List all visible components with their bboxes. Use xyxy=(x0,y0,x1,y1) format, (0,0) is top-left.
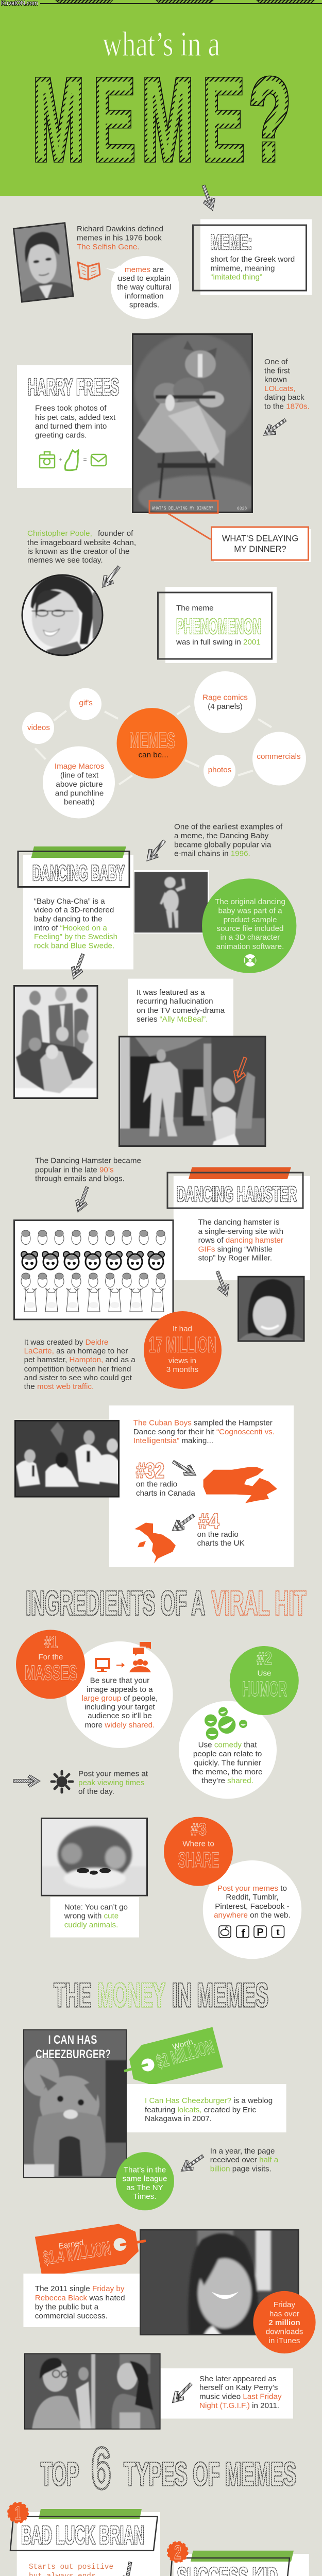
speech bubble: memes are xyxy=(125,265,164,274)
bubble: image macros: beneath) xyxy=(64,798,95,807)
panel: 2 use humor: people can relate to xyxy=(193,1750,262,1758)
price tag: earned 1.4 million: $1.4 MILLION xyxy=(42,2238,112,2269)
stat: 4 in UK: #4 xyxy=(198,1509,219,1533)
stat: 32 in Canada: #32 xyxy=(136,1459,164,1483)
bubble: gifs: gif's xyxy=(79,699,93,707)
panel: Harry Frees xyxy=(17,365,132,488)
panel: 3 where to share: #3 xyxy=(191,1820,207,1839)
price tag: earned 1.4 million xyxy=(35,2224,146,2277)
panel: Harry Frees: = xyxy=(83,456,87,463)
panel: 3 where to share: SHARE xyxy=(178,1848,219,1872)
text: first LOLcats: dating back xyxy=(264,393,304,402)
orange arrow xyxy=(230,1056,251,1085)
icon: book xyxy=(78,262,100,280)
icon: monitor to people xyxy=(95,1642,151,1672)
watermark: KuvatON.com xyxy=(1,1,38,7)
text: Dawkins: memes in his 1976 book xyxy=(77,234,162,242)
panel: Dancing Hamster: GIFs singing “Whistle xyxy=(198,1245,273,1254)
text: half a billion: received over half a xyxy=(210,2156,278,2164)
text: created by Deidre LaCarte: LaCarte, as an homage to her xyxy=(24,1347,128,1355)
map: Canada xyxy=(204,1467,277,1503)
photo: Richard Dawkins xyxy=(8,222,80,325)
bubble: NY Times league: That’s in the xyxy=(124,2166,166,2174)
bubble: 17 million views: It had xyxy=(173,1325,192,1333)
arrow xyxy=(212,1269,233,1299)
photo: Roger Miller xyxy=(238,1276,305,1342)
panel: 1 for the masses: MASSES xyxy=(25,1661,77,1685)
bubble: videos xyxy=(22,712,54,744)
speech bubble: information xyxy=(125,292,164,301)
panel: 2 Success Kid xyxy=(168,2542,309,2576)
arrow xyxy=(67,952,89,981)
arrow xyxy=(97,563,124,591)
panel: 2 use humor: HUMOR xyxy=(242,1677,287,1701)
panel: Cuban Boys xyxy=(109,1405,294,1567)
bubble: rage comics xyxy=(194,671,256,733)
bubble: 17 million views: 17 MILLION xyxy=(149,1333,216,1358)
bubble: original dancing baby: source file included xyxy=(216,924,284,933)
stat: 4 in UK xyxy=(134,1509,245,1564)
panel: meme phenomenon: was in full swing in 2001 xyxy=(176,638,261,647)
badge: number 1 xyxy=(8,2503,28,2524)
photo: Christopher Poole xyxy=(22,575,103,659)
panel: meme phenomenon xyxy=(158,587,277,663)
text: half a billion: billion page visits. xyxy=(210,2165,272,2174)
photo: dancing baby xyxy=(134,870,209,934)
title: MEME?: M xyxy=(33,54,84,184)
text: created by Deidre LaCarte: It was created by Deidre xyxy=(24,1338,108,1347)
note: cute animals: Note: You can’t go xyxy=(64,1903,128,1912)
heading: The Money in Memes: THE xyxy=(54,1976,91,2014)
text: created by Deidre LaCarte: the most web traffic. xyxy=(24,1382,94,1391)
title: MEME?: M xyxy=(142,54,193,184)
panel: Harry Frees: greeting cards. xyxy=(35,431,87,440)
bubble: original dancing baby: in a 3D character xyxy=(221,933,280,942)
panel: Ally McBeal text: series “Ally McBeal”. xyxy=(137,1015,208,1024)
icons: social networks: f xyxy=(241,1927,245,1940)
text: created by Deidre LaCarte: pet hamster, Hampton, and as a xyxy=(24,1355,135,1364)
panel: 2 use humor: quickly. The funnier xyxy=(194,1758,261,1767)
text: dancing hamster popular: popular in the late 90’s xyxy=(35,1165,114,1174)
panel: 2 use humor: Use xyxy=(257,1669,272,1678)
callout: caption: MY DINNER? xyxy=(234,545,286,554)
panel: Friday text: commercial success. xyxy=(35,2312,108,2320)
connector lines xyxy=(35,706,272,785)
bubble: image macros: (line of text xyxy=(60,771,99,780)
heading: Top 6 Types of Memes: TOP xyxy=(41,2455,79,2493)
text: first LOLcats: One of xyxy=(264,358,288,366)
bubble: Friday downloads: in iTunes xyxy=(268,2336,300,2345)
title: MEME?: ? xyxy=(249,54,291,184)
hamster dance image xyxy=(14,1220,173,1319)
panel: 2 use humor: they’re shared. xyxy=(201,1776,253,1785)
bubble: Friday downloads xyxy=(253,2291,316,2353)
panel: Harry Frees: Frees took photos of xyxy=(35,404,107,413)
stat: 32 in Canada: charts in Canada xyxy=(136,1489,195,1498)
bubble: image macros: and punchline xyxy=(55,789,104,798)
panel: I Can Has Cheezburger text: featuring lolcats, created by Eric xyxy=(145,2106,256,2114)
panel: Dancing Baby: baby dancing to the xyxy=(34,915,103,924)
photo: Last Friday Night xyxy=(24,2353,161,2430)
text: earliest examples: a meme, the Dancing Baby xyxy=(174,832,269,840)
text: first LOLcats: to the 1870s. xyxy=(264,402,310,411)
text: created by Deidre LaCarte: competition between her friend xyxy=(24,1365,131,1374)
speech bubble: the way cultural xyxy=(117,283,172,292)
bubble: photos xyxy=(204,755,235,787)
photo: Ally McBeal xyxy=(118,1036,266,1147)
panel: Katy Perry text: herself on Katy Perry’s xyxy=(199,2383,278,2392)
bubble: NY Times league xyxy=(116,2152,174,2210)
text: Christopher Poole: memes we see today. xyxy=(27,556,103,565)
icon: CD xyxy=(244,954,257,967)
text: Christopher Poole: Christopher Poole, xyxy=(27,529,92,538)
icons: camera plus cat equals mail xyxy=(40,450,106,470)
text: peak viewing times: peak viewing times xyxy=(78,1778,145,1787)
callout: caption xyxy=(211,527,311,562)
panel: 2 use humor: the meme, the more xyxy=(193,1768,263,1776)
panel: Cuban Boys: The Cuban Boys sampled the Hampster xyxy=(133,1419,273,1428)
price tag: worth 2 million: Worth xyxy=(172,2038,194,2052)
photo: Rebecca Black xyxy=(140,2229,299,2335)
callout: caption: WHAT'S DELAYING xyxy=(222,534,298,544)
panel: 1 for the masses: Be sure that your xyxy=(90,1676,149,1685)
text: first LOLcats: LOLcats, xyxy=(264,384,296,393)
panel: Friday text xyxy=(23,2274,140,2327)
bubble: memes can be xyxy=(116,708,188,778)
panel: Dancing Baby: intro of “Hooked on a xyxy=(34,924,107,933)
panel: meme definition: mimeme, meaning xyxy=(210,264,275,273)
price tag: earned 1.4 million: Earned xyxy=(58,2238,84,2251)
panel: Dancing Hamster: The dancing hamster is xyxy=(198,1218,280,1227)
map: UK xyxy=(134,1523,176,1564)
text: dancing hamster popular: through emails and blogs. xyxy=(35,1174,125,1183)
speech bubble: used to explain xyxy=(118,274,171,283)
bubble: NY Times league: Times. xyxy=(133,2192,157,2201)
panel: Ally McBeal text xyxy=(128,979,233,1037)
panel: 1 for the masses: large group of people, xyxy=(82,1694,158,1703)
bubble: memes can be: can be... xyxy=(139,751,168,759)
panel: Friday text: Rebecca Black was hated xyxy=(35,2294,125,2302)
icons: social networks: P xyxy=(257,1927,264,1938)
panel: 1 Bad Luck Brian: Starts out positive xyxy=(29,2563,113,2571)
bubble: Friday downloads: 2 million xyxy=(268,2318,300,2327)
text: Christopher Poole: is known as the creator of the xyxy=(27,547,129,556)
panel: 1 Bad Luck Brian xyxy=(8,2503,160,2576)
panel: meme phenomenon: The meme xyxy=(176,604,214,613)
icon: laughing faces xyxy=(205,1707,247,1740)
panel: meme definition: short for the Greek word xyxy=(210,255,295,264)
photo: Blue Swede xyxy=(13,985,98,1099)
title: MEME? xyxy=(33,54,291,184)
stat: 4 in UK: charts the UK xyxy=(197,1539,245,1548)
arrow xyxy=(72,1185,93,1214)
panel: Dancing Hamster xyxy=(167,1167,310,1280)
panel: 3 where to share: anywhere on the web. xyxy=(214,1911,291,1920)
title: whats in a: what’s in a xyxy=(103,24,220,63)
heading: Top 6 Types of Memes xyxy=(41,2436,296,2501)
panel: Cuban Boys: Intelligentsia” making... xyxy=(133,1436,213,1445)
panel: Cuban Boys: Dance song for their hit “Cognoscenti vs. xyxy=(133,1428,275,1436)
bubble: commercials xyxy=(252,732,306,785)
note: cute animals xyxy=(50,1897,139,1937)
arrow xyxy=(260,415,289,440)
caption highlight xyxy=(149,501,247,539)
icons: social networks: t xyxy=(276,1926,280,1938)
text: Christopher Poole: the imageboard website 4chan, xyxy=(27,538,136,547)
bubble: 17 million views xyxy=(144,1311,222,1389)
heading: Top 6 Types of Memes: 6 xyxy=(91,2436,111,2501)
bubble: image macros: Image Macros xyxy=(55,762,105,771)
bubble: videos: videos xyxy=(27,723,50,732)
stat: 32 in Canada xyxy=(136,1456,277,1503)
panel: Dancing Baby: Feeling” by the Swedish xyxy=(34,933,117,941)
panel: 2 use humor: Use comedy that xyxy=(198,1741,257,1750)
heading: The Money in Memes: MONEY xyxy=(97,1976,165,2014)
stat: 4 in UK: on the radio xyxy=(197,1530,239,1539)
price tag: worth 2 million: $2 MILLION xyxy=(154,2036,216,2073)
panel: Ally McBeal text: recurring hallucination xyxy=(137,997,213,1006)
text: half a billion: In a year, the page xyxy=(210,2147,275,2156)
bubble: original dancing baby: baby was part of a xyxy=(218,907,282,916)
bubble: rage comics: (4 panels) xyxy=(208,702,243,711)
photo: Frees cat xyxy=(132,333,253,513)
panel: I Can Has Cheezburger text xyxy=(127,2084,286,2132)
bubble: 17 million views: views in xyxy=(168,1357,196,1365)
panel: Katy Perry text: music video Last Friday xyxy=(199,2393,282,2401)
heading: The Money in Memes xyxy=(54,1976,268,2014)
bubble: rage comics: Rage comics xyxy=(202,693,248,702)
panel: 2 use humor: #2 xyxy=(257,1649,272,1669)
speech bubble xyxy=(105,256,179,319)
text: earliest examples: became globally popular via xyxy=(174,841,272,850)
panel: 1 for the masses: including your target xyxy=(84,1703,156,1711)
panel: Dancing Baby: video of a 3D-rendered xyxy=(34,906,114,914)
bubble: original dancing baby: animation software. xyxy=(216,942,284,951)
photo: fluffy cat xyxy=(41,1818,148,1896)
bubble: gifs xyxy=(70,688,101,720)
badge: number 1: 1 xyxy=(15,2503,21,2524)
panel: 3 where to share: Where to xyxy=(182,1839,214,1849)
panel: Dancing Hamster: stop” by Roger Miller. xyxy=(198,1254,272,1263)
bubble: original dancing baby xyxy=(202,878,296,973)
panel: meme definition xyxy=(193,219,312,295)
panel: 3 where to share xyxy=(164,1817,301,1959)
title: MEME?: E xyxy=(203,54,244,184)
panel: Dancing Baby xyxy=(18,846,133,970)
bubble: Friday downloads: Friday xyxy=(274,2300,296,2309)
photo: I Can Has Cheezburger xyxy=(23,2029,127,2178)
panel: Harry Frees: + xyxy=(58,456,62,463)
panel: I Can Has Cheezburger text: Nakagawa in 2007. xyxy=(145,2114,212,2123)
panel: 3 where to share: Post your memes to xyxy=(217,1884,287,1893)
panel: Harry Frees: and turned them into xyxy=(35,422,107,431)
bubble: photos: photos xyxy=(208,766,232,774)
heading: MEME:: MEME: xyxy=(210,230,252,254)
price tag: worth 2 million xyxy=(124,2027,223,2085)
bubble: memes can be: MEMES xyxy=(129,728,175,753)
panel: Dancing Baby: rock band Blue Swede. xyxy=(34,942,114,951)
arrow xyxy=(142,837,169,865)
title: MEME?: E xyxy=(94,54,135,184)
heading: Dancing Baby: DANCING BABY xyxy=(32,861,125,886)
green title banner xyxy=(0,0,322,196)
bubble: image macros: above picture xyxy=(56,780,103,789)
panel: 1 for the masses: image appeals to a xyxy=(87,1685,153,1694)
text: first LOLcats: known xyxy=(264,375,287,384)
heading: Harry Frees: HARRY FREES xyxy=(28,374,119,400)
bubble: Friday downloads: has over xyxy=(269,2310,299,2318)
panel: Katy Perry text: Night (T.G.I.F.) in 2011. xyxy=(199,2401,279,2410)
icons: social networks xyxy=(219,1926,284,1940)
panel: 1 for the masses xyxy=(16,1630,173,1748)
bubble: commercials: commercials xyxy=(257,752,301,761)
text: peak viewing times: Post your memes at xyxy=(78,1770,148,1778)
panel: 2 use humor xyxy=(179,1646,299,1799)
panel: 1 for the masses: audience so it'll be xyxy=(88,1711,152,1720)
panel: Katy Perry text: She later appeared as xyxy=(199,2375,277,2383)
bubble: original dancing baby: product sample xyxy=(224,916,277,924)
bubble: Friday downloads: downloads xyxy=(266,2328,303,2336)
panel: Harry Frees: his pet cats, added text xyxy=(35,413,116,422)
panel: 1 for the masses: For the xyxy=(38,1653,63,1662)
icon: sun xyxy=(52,1771,73,1792)
panel: Ally McBeal text: on the TV comedy-drama xyxy=(137,1006,225,1015)
panel: Katy Perry text xyxy=(161,2368,293,2418)
text: first LOLcats: the first xyxy=(264,366,291,375)
arrow xyxy=(198,183,218,213)
bubble: 17 million views: 3 months xyxy=(166,1365,199,1374)
bubble: original dancing baby: The original dancing xyxy=(215,897,285,906)
panel: meme definition: “imitated thing” xyxy=(210,273,262,281)
text: created by Deidre LaCarte: and sister to see who could get xyxy=(24,1374,132,1382)
bubble: image macros xyxy=(43,746,115,818)
photo: I Can Has Cheezburger: I CAN HAS xyxy=(48,2033,97,2047)
panel: 1 for the masses: more widely shared. xyxy=(84,1721,155,1730)
arrow xyxy=(13,1775,40,1787)
panel: Dancing Hamster: a single-serving site with xyxy=(198,1227,283,1236)
panel: 3 where to share: Pinterest, Facebook - xyxy=(215,1902,290,1911)
caption highlight: WHAT'S DELAYING MY DINNER? xyxy=(152,505,213,511)
text: earliest examples: e-mail chains in 1996. xyxy=(174,850,250,858)
stat: 32 in Canada: on the radio xyxy=(136,1480,177,1489)
text: Christopher Poole: founder of xyxy=(98,529,133,538)
caption highlight: 6328 xyxy=(237,506,247,511)
badge: number 2 xyxy=(168,2542,188,2564)
text: peak viewing times: of the day. xyxy=(78,1787,114,1796)
panel: Friday text: by the public but a xyxy=(35,2302,99,2311)
panel: I Can Has Cheezburger text: I Can Has Cheezburger? is a weblog xyxy=(145,2096,273,2105)
text: Dawkins: The Selfish Gene. xyxy=(77,243,140,251)
text: earliest examples: One of the earliest examples of xyxy=(174,822,283,832)
panel: 3 where to share: Reddit, Tumblr, xyxy=(226,1893,278,1902)
bubble: NY Times league: same league xyxy=(123,2174,167,2183)
note: cute animals: cuddly animals. xyxy=(64,1921,118,1929)
panel: Ally McBeal text: It was featured as a xyxy=(137,988,205,997)
text: dancing hamster popular: The Dancing Hamster became xyxy=(35,1157,141,1165)
bubble: NY Times league: as The NY xyxy=(126,2183,163,2192)
panel: 1 for the masses: #1 xyxy=(44,1632,58,1651)
badge: number 2: 2 xyxy=(174,2542,181,2564)
panel: Friday text: The 2011 single Friday by xyxy=(35,2284,124,2293)
speech bubble: spreads. xyxy=(129,301,159,309)
photo: Cuban Boys xyxy=(14,1420,120,1498)
text: Dawkins: Richard Dawkins defined xyxy=(77,225,163,233)
arrow xyxy=(178,2151,207,2176)
panel: Dancing Baby: “Baby Cha-Cha” is a xyxy=(34,897,105,906)
heading: Bad Luck Brian: BAD LUCK BRIAN xyxy=(21,2520,144,2550)
note: cute animals: wrong with cute xyxy=(64,1912,118,1921)
panel: Dancing Hamster: rows of dancing hamster xyxy=(198,1236,283,1245)
